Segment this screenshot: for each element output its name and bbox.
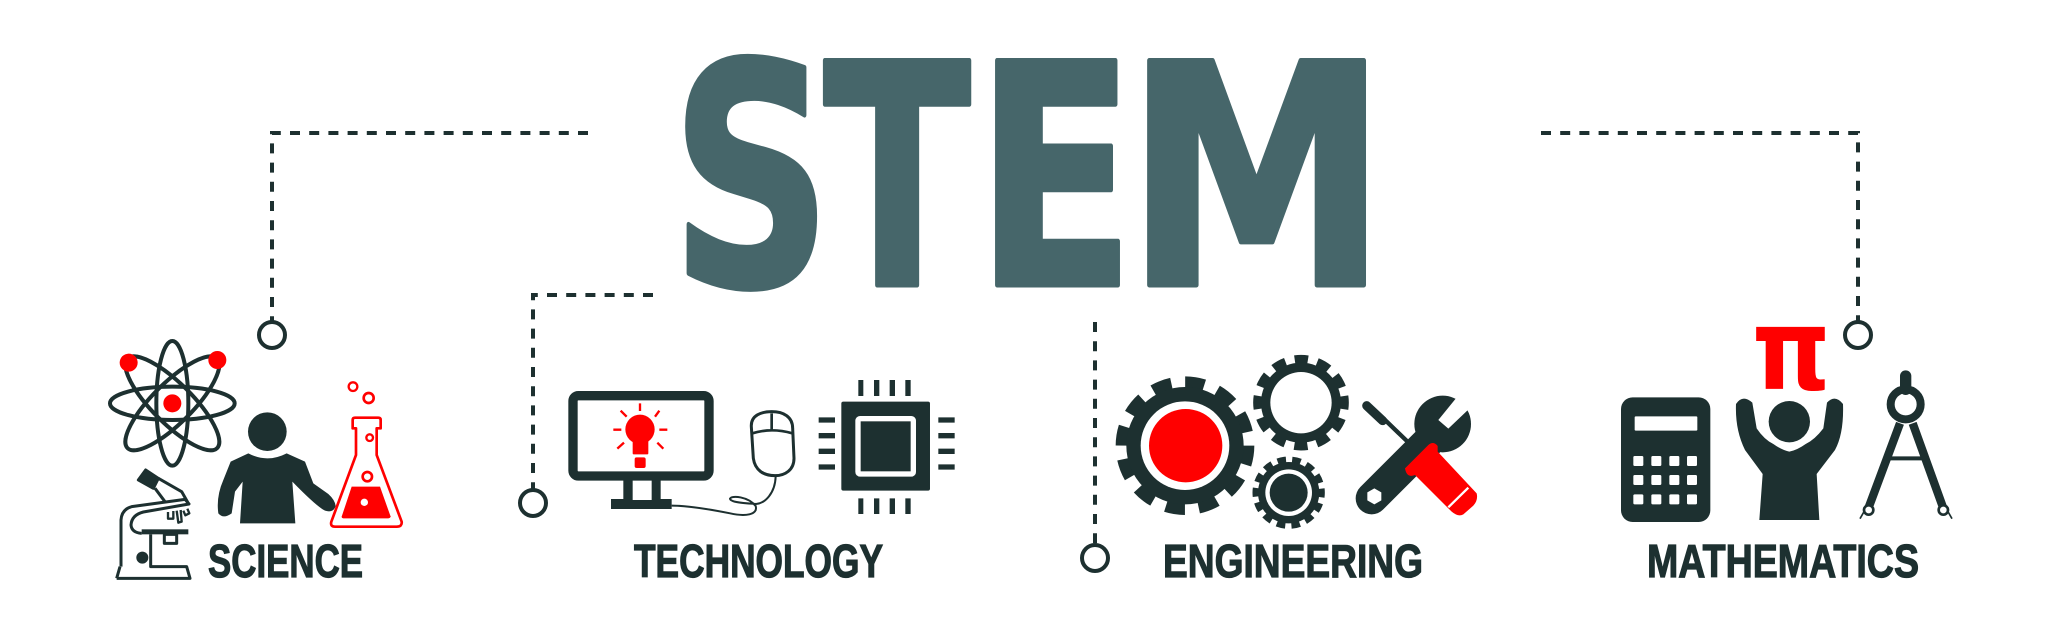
icon: medium gear (1251, 353, 1351, 452)
title: STEM (671, 0, 1388, 358)
icon: person raising arms (1736, 399, 1843, 520)
icon: flask (331, 382, 402, 527)
label: science: SCIENCE (208, 535, 363, 587)
icon: mouse (672, 412, 794, 515)
connector: technology (520, 295, 653, 516)
label: engineering: ENGINEERING (1163, 535, 1423, 587)
label: mathematics: MATHEMATICS (1647, 535, 1919, 587)
title: STEM: M (1125, 0, 1388, 358)
icon: microchip (819, 380, 955, 514)
title: STEM: T (824, 0, 972, 358)
icon: calculator (1621, 397, 1710, 522)
icon: small gear (1252, 456, 1325, 529)
label: technology: TECHNOLOGY (634, 535, 883, 587)
icon: wrench and screwdriver (1367, 392, 1477, 515)
icon: pi symbol: π (1752, 285, 1831, 417)
panel: engineering (1122, 353, 1477, 587)
title: STEM: S (671, 0, 832, 358)
connector: science (259, 133, 588, 348)
icon: large red gear (1122, 382, 1248, 509)
icon: microscope (117, 470, 190, 578)
icon: person (218, 412, 336, 523)
icon: monitor with light bulb (573, 396, 709, 509)
panel: science (110, 341, 402, 587)
icon: drawing compass (1860, 376, 1952, 519)
panel: mathematics (1621, 285, 1952, 587)
panel: technology (573, 380, 955, 587)
title: STEM: E (976, 0, 1135, 358)
connector: engineering (1082, 322, 1108, 571)
icon: atom (110, 341, 235, 466)
connector: mathematics (1541, 133, 1871, 348)
